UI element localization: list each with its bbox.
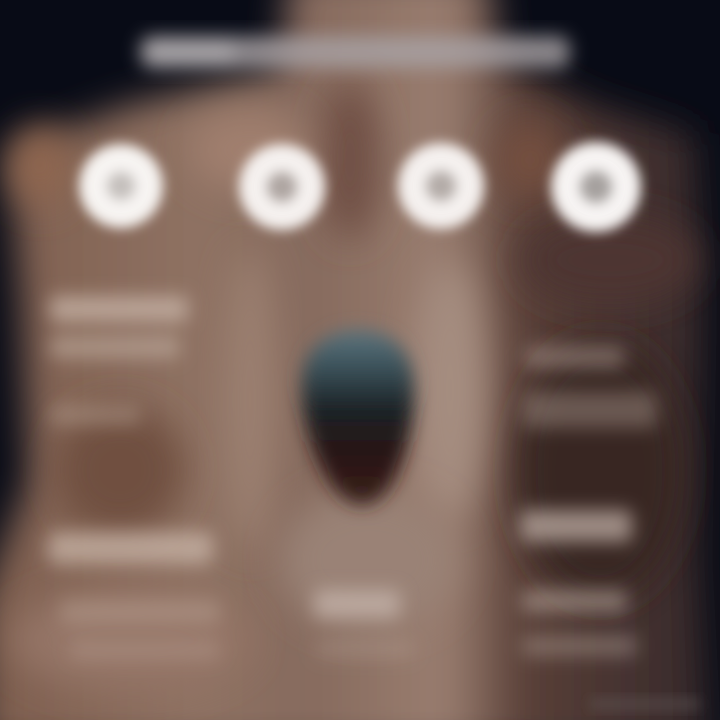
- circle icons row: [79, 142, 641, 232]
- text block: lower centre: [314, 590, 415, 658]
- text block: upper left: [50, 296, 188, 425]
- text block: lower right: [520, 510, 637, 656]
- central dark globe: [302, 330, 414, 505]
- footer mark: [590, 698, 700, 710]
- icon: circle 3: [398, 143, 484, 229]
- title: [140, 36, 570, 68]
- text block: lower left: [48, 532, 220, 660]
- icon: circle 1: [79, 144, 163, 228]
- icon: circle 2: [239, 144, 325, 230]
- icon: circle 4: [551, 142, 641, 232]
- text block: upper right: [522, 346, 657, 428]
